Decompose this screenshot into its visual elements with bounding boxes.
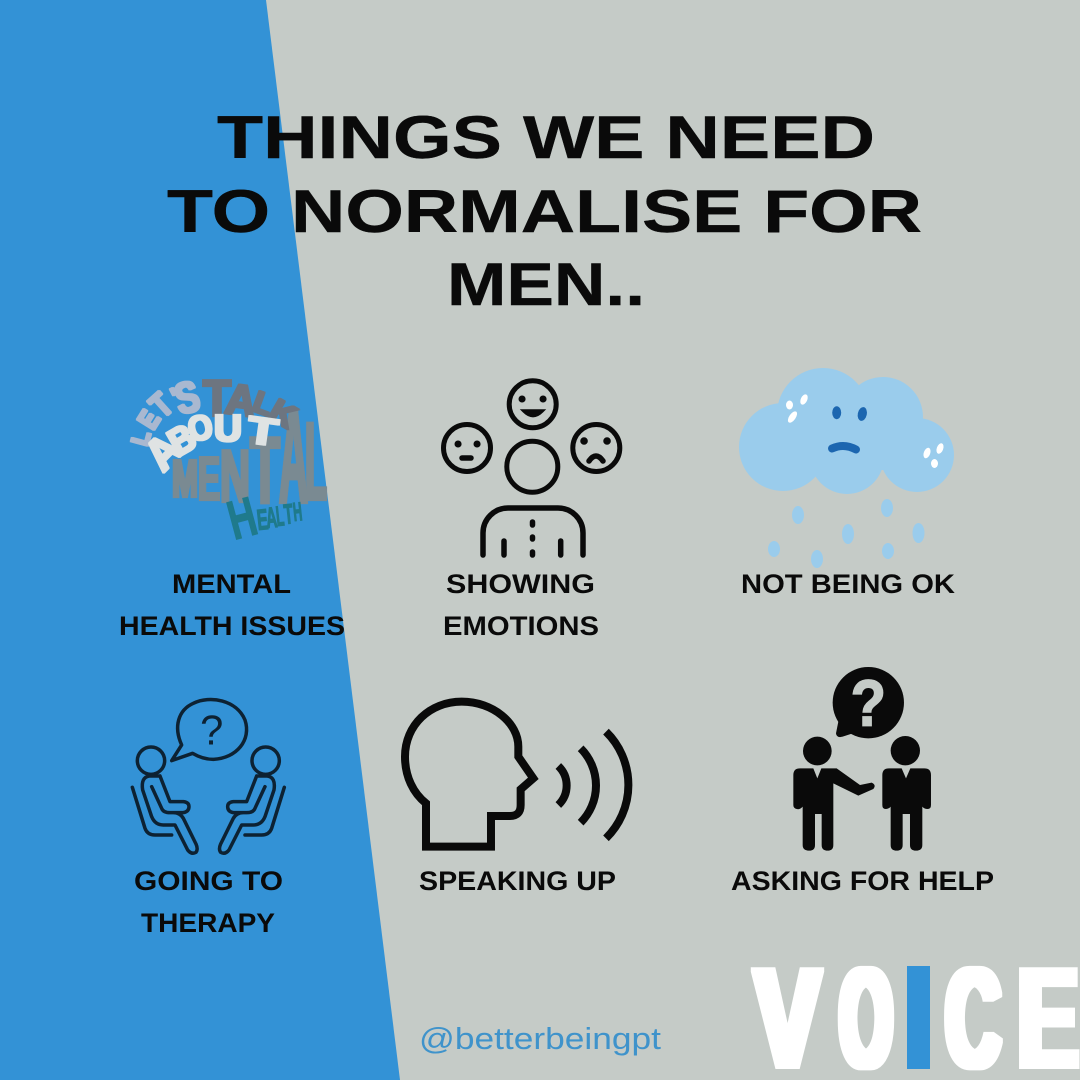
icon: brain made of words: L bbox=[127, 428, 156, 449]
icon: brain made of words: L bbox=[274, 500, 286, 532]
icon: brain made of words: U bbox=[214, 408, 242, 450]
icon: brain made of words: E bbox=[132, 405, 166, 434]
label: mental health issues bbox=[119, 569, 345, 641]
title: TO NORMALISE FOR bbox=[167, 178, 922, 245]
icon: brain made of words: A bbox=[135, 424, 191, 480]
icon: brain made of words: M bbox=[172, 449, 198, 509]
icon: brain made of words: H bbox=[291, 496, 304, 527]
background: blue diagonal panel bbox=[0, 0, 400, 1080]
title bbox=[167, 104, 922, 318]
icon: sad rain cloud bbox=[739, 368, 954, 568]
icon: brain made of words: A bbox=[223, 374, 259, 427]
label: showing emotions: SHOWING bbox=[446, 569, 595, 599]
label: showing emotions bbox=[443, 569, 599, 641]
label: speaking up: SPEAKING UP bbox=[419, 866, 616, 896]
text: L bbox=[305, 399, 327, 524]
label: going to therapy: GOING TO bbox=[134, 866, 283, 896]
icon: speaking head with sound waves bbox=[405, 702, 628, 847]
icon: brain made of words: K bbox=[264, 392, 302, 435]
icon: brain made of words: T bbox=[203, 370, 231, 428]
label: asking for help: ASKING FOR HELP bbox=[731, 866, 994, 896]
icon: two people in therapy: ? bbox=[200, 706, 223, 753]
label: mental health issues: MENTAL bbox=[172, 569, 291, 599]
label: not being ok: NOT BEING OK bbox=[741, 569, 956, 599]
icon: brain made of words: T bbox=[143, 386, 180, 425]
label: mental health issues: HEALTH ISSUES bbox=[119, 611, 345, 641]
icon: brain made of words: A bbox=[264, 502, 279, 535]
label: going to therapy bbox=[134, 866, 283, 938]
icon: two people in therapy bbox=[132, 699, 284, 853]
social handle: @betterbeingpt bbox=[419, 1021, 661, 1056]
icon: brain made of words: B bbox=[162, 416, 203, 465]
icon: brain made of words: H bbox=[221, 485, 263, 552]
label: going to therapy: THERAPY bbox=[141, 908, 275, 938]
icon: brain made of words: T bbox=[282, 498, 295, 530]
icon: brain made of words: E bbox=[198, 445, 220, 514]
icon: brain made of words bbox=[127, 370, 327, 552]
title: THINGS WE NEED bbox=[217, 104, 875, 171]
icon: brain made of words: E bbox=[255, 504, 270, 537]
text: A bbox=[279, 381, 308, 532]
icon: brain made of words: S bbox=[170, 371, 205, 425]
icon: brain made of words: T bbox=[245, 409, 280, 455]
icon: two men asking for help bbox=[793, 667, 931, 851]
logo: VOICE bbox=[755, 939, 1078, 1080]
icon: brain made of words: T bbox=[250, 417, 280, 524]
icon: brain made of words: ' bbox=[167, 382, 184, 411]
title: MEN.. bbox=[447, 251, 645, 318]
icon: brain made of words: N bbox=[220, 434, 250, 518]
icon: brain made of words: O bbox=[185, 407, 216, 450]
label: showing emotions: EMOTIONS bbox=[443, 611, 599, 641]
icon: person with emotion faces bbox=[444, 381, 620, 555]
icon: two men asking for help: ? bbox=[851, 667, 886, 740]
icon: brain made of words: L bbox=[249, 386, 277, 423]
